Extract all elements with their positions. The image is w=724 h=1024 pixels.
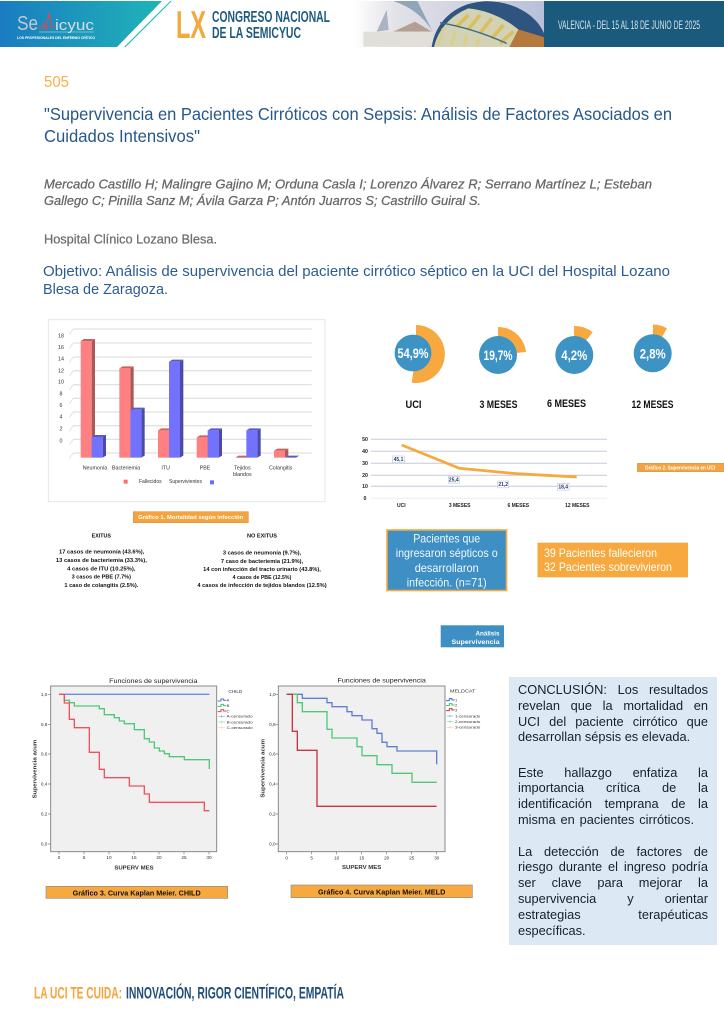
axes labels: 15: [131, 855, 137, 860]
plot area: [51, 686, 217, 852]
category labels: [83, 466, 293, 478]
panel: conclusion: La detección de factores de: [518, 844, 708, 858]
legend: 1: [455, 697, 458, 702]
caption: Gráfico 2: Gráfico 2. Supervivencia en UCI: [645, 466, 716, 472]
legend: 1-censurado: [455, 713, 481, 718]
axes labels: 5: [83, 855, 86, 860]
legend: B-censurado: [227, 719, 254, 724]
legend: A-censurado: [227, 714, 254, 719]
header: congress title: LX: [176, 4, 206, 47]
axes labels: 5: [310, 855, 313, 860]
objective: Blesa de Zaragoza.: [43, 282, 168, 298]
text block: NO EXITUS: [197, 534, 327, 589]
curve: MELD 1: [287, 694, 437, 764]
header: blue logo panel: LOS PROFESIONALES DEL ENFERMO CRÍTICO: [17, 35, 96, 40]
footer slogan: [34, 984, 344, 1002]
callout: total patients: infección. (n=71): [407, 576, 487, 590]
caption: Gráfico 4: [291, 885, 472, 898]
panel: conclusion: identificación temprana de la: [518, 796, 708, 811]
axes labels: 0,6: [269, 752, 276, 757]
donut: UCI 54,9%: [395, 325, 445, 411]
y axis labels: 0: [60, 438, 63, 444]
category labels: Neumonía: [83, 466, 107, 472]
axes labels: 25: [409, 855, 415, 860]
data labels: [393, 456, 569, 490]
axes labels: 1,0: [41, 692, 48, 697]
panel: conclusion: riesgo durante el ingreso podría: [518, 859, 708, 874]
axes labels: Supervivencia acum: [261, 739, 267, 798]
data labels: 45,1: [394, 457, 404, 463]
axes labels: SUPERV MES: [342, 865, 382, 871]
text block: NO EXITUS: 4 casos de infección de tejidos blandos (12.5%): [197, 583, 327, 589]
donut: UCI 54,9%: 54,9%: [398, 346, 428, 361]
axes labels: 0,8: [41, 722, 48, 727]
axes labels: 25: [181, 855, 187, 860]
panel: survival donuts: [395, 324, 674, 411]
bars: Neumonia: [81, 339, 106, 458]
header banner: [0, 1, 724, 47]
bars: Colangitis: [274, 449, 299, 458]
header: congress title: DE LA SEMICYUC: [212, 25, 301, 42]
category labels: Bacteriemia: [112, 466, 140, 472]
plot area: [278, 686, 445, 852]
axes labels: 0: [58, 855, 61, 860]
callout: deceased and survivors: [538, 543, 688, 577]
callout: deceased and survivors: 32 Pacientes sobrevivieron: [544, 560, 672, 574]
title: Cuidados Intensivos": [44, 126, 200, 146]
bar chart: mortality by infection: [48, 320, 325, 502]
panel: conclusion: CONCLUSIÓN: Los resultados: [518, 682, 708, 696]
legend: C: [227, 708, 230, 713]
panel: conclusion: UCI del paciente cirrótico que: [518, 714, 708, 728]
category labels: PBE: [200, 466, 211, 472]
y axis labels: 4: [60, 415, 63, 421]
y axis labels: 10: [58, 380, 64, 386]
category labels: ITU: [161, 466, 170, 472]
x axis labels: 12 MESES: [565, 503, 590, 509]
axes labels: 0,2: [41, 812, 48, 817]
axes labels: 15: [359, 855, 365, 860]
callout: total patients: Pacientes que: [413, 532, 480, 546]
donut: 6 meses 4,2%: 6 MESES: [547, 398, 586, 410]
panel: conclusion: [509, 677, 717, 945]
legend: MELDCAT: [450, 689, 476, 694]
donut: 3 meses 19,7%: [479, 327, 526, 411]
footer slogan: INNOVACIÓN, RIGOR CIENTÍFICO, EMPATÍA: [126, 984, 344, 1002]
y axis labels: [58, 333, 64, 444]
label: Análisis Supervivencia: Análisis: [476, 632, 500, 638]
header: blue logo panel: Se: [17, 13, 38, 35]
legend: [218, 689, 254, 730]
legend: CHILD: [228, 689, 243, 694]
legend: A: [227, 698, 230, 703]
x axis labels: 3 MESES: [449, 503, 471, 509]
y axis labels: 18: [58, 333, 64, 339]
caption: Gráfico 2: [638, 464, 724, 472]
panel: Kaplan Meier CHILD: [33, 678, 254, 898]
caption: Gráfico 1: Gráfico 1. Mortalidad según infección: [138, 515, 244, 521]
legend: 2-censurado: [455, 719, 481, 724]
objective: Objetivo: Análisis de supervivencia del paciente cirrótico séptico en la UCI del Hospital Lozano: [43, 264, 670, 280]
text block: EXITUS: 3 casos de PBE (7.7%): [72, 575, 131, 581]
axes labels: Supervivencia acum: [33, 740, 39, 798]
donut: 6 meses 4,2%: 4,2%: [561, 348, 587, 363]
text block: EXITUS: 13 casos de bacteriemia (33.3%),: [56, 558, 147, 564]
legend: Supervivientes: [169, 479, 202, 485]
text block: EXITUS: 17 casos de neumonía (43.6%),: [59, 550, 145, 556]
curve: MELD 3: [287, 694, 437, 806]
header: congress title: [176, 4, 330, 47]
donut: 12 meses 2,8%: 2,8%: [640, 346, 666, 362]
panel: Kaplan Meier MELD: [261, 677, 481, 898]
header: blue logo panel: icyuc: [55, 17, 95, 34]
donut: 3 meses 19,7%: 19,7%: [484, 348, 512, 363]
y axis labels: 30: [362, 461, 368, 467]
legend: 3: [455, 707, 458, 712]
hospital: Hospital Clínico Lozano Blesa.: [44, 232, 217, 246]
axes labels: 10: [334, 855, 340, 860]
text block: EXITUS: EXITUS: [92, 534, 111, 540]
donut: 3 meses 19,7%: 3 MESES: [480, 399, 518, 411]
axes labels: 0,0: [269, 842, 276, 847]
data labels: 21,2: [498, 482, 508, 488]
objective: [43, 264, 670, 298]
callout: total patients: ingresaron sépticos o: [396, 546, 498, 560]
panel: conclusion: misma en pacientes cirróticos.: [518, 812, 694, 826]
y axis labels: 6: [60, 403, 63, 409]
text block: EXITUS: 1 caso de colangitis (2.5%).: [64, 583, 139, 589]
panel: conclusion: Este hallazgo enfatiza la: [518, 764, 708, 780]
authors: [44, 176, 652, 208]
header: date panel: [544, 1, 724, 47]
bars: PBE: [197, 428, 222, 458]
axes labels: 0,2: [269, 812, 276, 817]
title: [44, 104, 672, 146]
text block: NO EXITUS: NO EXITUS: [247, 534, 277, 540]
panel: conclusion: específicas.: [518, 923, 586, 938]
text block: NO EXITUS: 14 con infección del tracto urinario (43.8%),: [203, 567, 321, 573]
data labels: 25,4: [449, 477, 459, 483]
category labels: blandos: [233, 472, 252, 478]
caption: Gráfico 3: Gráfico 3. Curva Kaplan Meier. CHILD: [73, 890, 201, 897]
callout: total patients: [387, 530, 506, 590]
curve: Child C: [59, 694, 209, 811]
bars: ITU: [158, 360, 183, 458]
header: blue logo panel: [0, 1, 171, 47]
panel: conclusion: revelan que la mortalidad en: [518, 698, 708, 712]
axes labels: 10: [106, 855, 112, 860]
caption: Gráfico 3: [46, 886, 228, 898]
donut: 12 meses 2,8%: [632, 324, 674, 411]
caption: Gráfico 4: Gráfico 4. Curva Kaplan Meier. MELD: [318, 889, 445, 896]
axes labels: 20: [156, 855, 162, 860]
data labels: 18,4: [558, 484, 568, 490]
category labels: Tejidos: [234, 466, 251, 472]
y axis labels: 20: [362, 473, 368, 479]
authors: Gallego C; Pinilla Sanz M; Ávila Garza P; Antón Juarros S; Castrillo Guiral S.: [44, 193, 481, 208]
header: architecture photo: [353, 1, 545, 47]
axes labels: 0,4: [269, 782, 276, 787]
axes labels: SUPERV MES: [114, 865, 154, 871]
panel: conclusion: importancia crítica de la: [518, 780, 708, 795]
panel: conclusion: ser clave para mejorar la: [518, 875, 708, 890]
y axis labels: 8: [60, 391, 63, 397]
panel: conclusion: desarrollan sépsis es elevada.: [518, 729, 690, 744]
axes labels: [261, 692, 440, 871]
line chart: survival over time: [362, 437, 607, 509]
survival line: [402, 445, 577, 477]
footer slogan: LA UCI TE CUIDA:: [34, 984, 122, 1002]
axes labels: 1,0: [269, 692, 276, 697]
bars: Tejidos blandos: [235, 428, 261, 458]
donut: UCI 54,9%: UCI: [406, 399, 422, 411]
label: Análisis Supervivencia: [441, 625, 504, 647]
axes labels: 0,6: [41, 752, 48, 757]
legend: 3-censurado: [455, 725, 481, 730]
y axis labels: [362, 437, 368, 502]
y axis labels: 40: [362, 449, 368, 455]
text block: NO EXITUS: 4 casos de PBE (12.5%): [233, 575, 291, 581]
axes labels: 30: [434, 855, 440, 860]
caption: Gráfico 1: [133, 512, 248, 523]
donut: 12 meses 2,8%: 12 MESES: [632, 399, 674, 411]
axes labels: 20: [384, 855, 390, 860]
text block: EXITUS: 4 casos de ITU (10.25%),: [67, 566, 136, 572]
y axis labels: 14: [58, 357, 64, 363]
text block: NO EXITUS: 3 casos de neumonía (9.7%),: [223, 551, 302, 557]
panel: conclusion: supervivencia y orientar: [518, 891, 708, 906]
axes labels: 30: [206, 855, 212, 860]
axes labels: 0,8: [269, 722, 276, 727]
chart title: Funciones de supervivencia: [337, 677, 426, 684]
x axis labels: UCI: [397, 503, 406, 509]
curve: MELD 2: [287, 694, 437, 782]
callout: total patients: desarrollaron: [415, 561, 479, 575]
legend: Fallecidos: [139, 479, 162, 485]
bars: Bacteriemia: [119, 366, 145, 458]
curve: Child A: [59, 692, 209, 696]
y axis labels: 16: [58, 345, 64, 351]
label: Análisis Supervivencia: Supervivencia: [452, 640, 500, 646]
category labels: Colangitis: [269, 466, 293, 472]
donut: 6 meses 4,2%: [547, 326, 593, 410]
axes labels: 0,4: [41, 782, 48, 787]
y axis labels: 50: [362, 437, 368, 443]
axes labels: 0: [285, 855, 288, 860]
x axis labels: [397, 503, 590, 509]
curve: Child B: [59, 694, 209, 769]
legend: B: [227, 703, 230, 708]
authors: Mercado Castillo H; Malingre Gajino M; Orduna Casla I; Lorenzo Álvarez R; Serrano Martínez L; Esteban: [44, 176, 652, 192]
x axis labels: 6 MESES: [507, 503, 530, 509]
axes labels: [33, 692, 212, 871]
y axis labels: 10: [362, 484, 368, 490]
axes labels: 0,0: [41, 842, 48, 847]
abstract number: 505: [44, 74, 69, 91]
chart title: Funciones de supervivencia: [109, 678, 198, 685]
text block: EXITUS: [56, 534, 147, 589]
legend: C-censurado: [227, 725, 254, 730]
header: congress title: CONGRESO NACIONAL: [212, 9, 330, 26]
y axis labels: 2: [60, 426, 63, 432]
title: "Supervivencia en Pacientes Cirróticos con Sepsis: Análisis de Factores Asociados en: [44, 104, 672, 124]
y axis labels: 0: [364, 496, 367, 502]
legend: 2: [455, 702, 458, 707]
panel: mortality by infection: [48, 320, 327, 589]
callout: deceased and survivors: 39 Pacientes fallecieron: [544, 546, 657, 560]
legend: [124, 479, 214, 485]
panel: conclusion: estrategias terapéuticas: [518, 907, 708, 922]
y axis labels: 12: [58, 368, 64, 374]
legend: [446, 689, 481, 730]
text block: NO EXITUS: 7 caso de bacteriemia (21.9%),: [221, 559, 304, 565]
